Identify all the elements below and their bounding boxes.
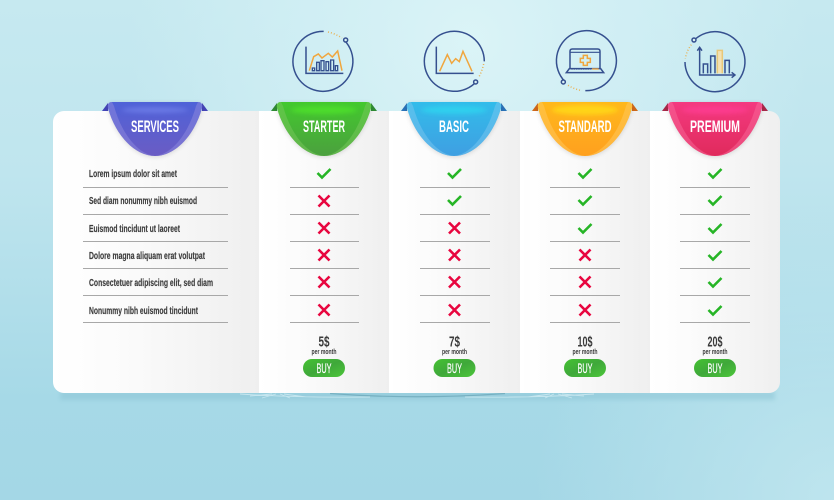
price: starter [303,334,345,377]
ribbon: basic: BASIC [439,118,469,136]
price: basic: 7$ [449,334,460,350]
button: buy starter: BUY [316,360,332,376]
icon: standard medical laptop [556,31,616,91]
price: standard: 10$ [578,334,593,350]
service feature list: Nonummy nibh euismod tincidunt [89,306,198,317]
column: premium background [650,111,780,393]
service feature list: Euismod tincidunt ut laoreet [89,224,180,235]
column: starter background [259,111,389,393]
marks: standard column [578,169,592,316]
service feature list: Dolore magna aliquam erat volutpat [89,251,205,262]
marks: premium column [708,169,722,314]
ribbon: standard: STANDARD [558,118,612,136]
price: starter: 5$ [318,334,330,350]
service feature list: Sed diam nonummy nibh euismod [89,196,197,207]
service feature list [89,169,213,317]
marks: basic column [448,169,461,316]
ribbon: starter: STARTER [303,118,345,136]
column: services background [53,111,259,393]
button: buy basic: BUY [447,360,462,376]
service feature list: Consectetuer adipiscing elit, sed diam [89,278,213,289]
ribbon: basic [401,102,507,157]
price: basic [434,334,476,377]
column: basic background [389,111,520,393]
price: premium: per month [702,347,728,356]
price: premium [694,334,736,377]
price: standard [564,334,606,377]
marks: starter column [318,169,330,316]
icon: basic line chart [424,31,484,91]
ribbon: starter [271,102,377,157]
ribbon: standard [532,102,638,157]
ribbon: premium: PREMIUM [690,118,740,136]
price: standard: per month [572,347,598,356]
icon: premium bar chart [685,32,745,92]
panel shadow under table [60,391,775,400]
price: basic: per month [442,347,467,356]
row divider lines [83,188,750,322]
button: buy premium: BUY [707,360,723,376]
ribbon: services [102,102,208,157]
column: standard background [520,111,650,393]
price: premium: 20$ [708,334,723,350]
panel: pricing table background [53,111,780,393]
ribbon: services: SERVICES [131,118,179,136]
ribbon: premium [662,102,768,157]
button: buy standard: BUY [577,360,593,376]
service feature list: Lorem ipsum dolor sit amet [89,169,177,180]
price: starter: per month [312,347,337,356]
icon: starter bar and line chart [293,31,353,91]
